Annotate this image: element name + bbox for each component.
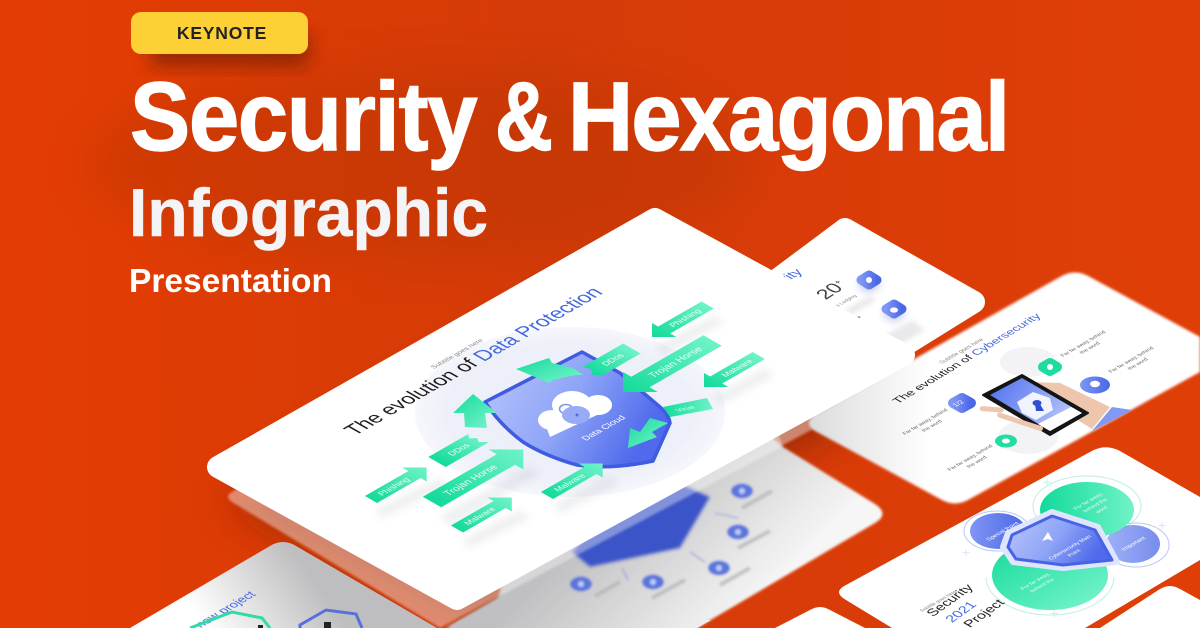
slide title: The evolution of Data Protection (339, 284, 608, 438)
icon: blue chart tile (952, 398, 971, 408)
slide title: 2021 (942, 599, 980, 624)
dark glow behind headings (90, 70, 750, 260)
white screen strip (1038, 407, 1082, 431)
node circles (570, 484, 753, 592)
panel: new project slide (130, 542, 437, 628)
fingers (980, 406, 1044, 432)
hexagon: blue (300, 610, 362, 628)
arrow: ddos lower (428, 432, 489, 467)
screen shield (1017, 392, 1053, 420)
icon: blue chart tile: 1/2 (952, 400, 966, 408)
arrow: phishing top: Phishing (667, 307, 704, 329)
shield label: Point (1067, 549, 1083, 558)
arrow: phishing top (640, 298, 720, 344)
node centres (578, 488, 745, 587)
slide title (923, 582, 1008, 628)
arrow: trojan horse lower (415, 440, 541, 512)
captions: Far far away, behind (1060, 330, 1108, 358)
back of hand (1032, 382, 1110, 429)
slide title: Security (923, 582, 977, 618)
captions (902, 330, 1163, 476)
arrow: ddos top: DDos (599, 352, 626, 367)
arrow: trojan horse top: Trojan Horse (646, 345, 706, 380)
lock (560, 404, 590, 424)
arrow: trojan horse top (606, 330, 730, 402)
cloud with lock (538, 391, 612, 437)
title: security & hexagonal: Hexagonal (568, 62, 1008, 171)
badge: keynote (131, 12, 310, 66)
stat: fragment: + (854, 314, 864, 321)
circle: special point: Special Point (986, 521, 1021, 542)
arrow shadows (375, 315, 774, 548)
stat label: vs Lodging (833, 294, 859, 309)
slide subtitle: Subtitle goes here (939, 338, 986, 365)
arrow: malware lower: Malware (461, 505, 498, 527)
icon: blue smile badge (1080, 376, 1110, 394)
arrow: ddos lower: DDos (445, 442, 472, 457)
plus marks: + (1043, 474, 1051, 490)
icon: green thumb badge (995, 434, 1017, 448)
arrow: up broken (453, 394, 497, 428)
blue pentagon (572, 470, 710, 567)
slide title fragment: rity (776, 266, 806, 283)
captions: Far far away, behind (947, 444, 995, 472)
halo (415, 327, 725, 497)
circle: top green (1040, 482, 1134, 538)
slide subtitle: Subtitle goes here (919, 590, 959, 613)
arrow: malware right (535, 456, 615, 502)
subtitle: presentation: Presentation (129, 263, 332, 300)
stat: 20+: :20 (807, 281, 848, 305)
shield (485, 352, 670, 467)
arrow: malware lower (445, 490, 524, 536)
icon: blue gear tile (856, 275, 882, 294)
panel: security stats slide (750, 229, 974, 379)
glass band over lower slide (500, 415, 783, 596)
circle: bottom green: For far away, (1020, 572, 1053, 591)
title: security & hexagonal: & (495, 62, 553, 171)
circle: important: Important (1121, 536, 1148, 552)
panel: cybersecurity slide (809, 272, 1200, 504)
captions: Far far away, behind (1108, 346, 1156, 374)
stat: 20+: + (831, 278, 844, 286)
arrow: malware right: Malware (551, 472, 588, 493)
gears (998, 347, 1058, 454)
circle rings (964, 476, 1169, 615)
connector lines (622, 513, 738, 580)
phone illustration (980, 375, 1132, 435)
label: data cloud: Data Cloud (579, 414, 628, 442)
arrow: virus (663, 398, 713, 417)
hexagon icons (258, 622, 331, 628)
icon: blue thumb tile (881, 304, 907, 323)
captions: the word (1127, 357, 1150, 371)
shield arrow icon (1042, 532, 1053, 541)
panel: security 2021 project slide (839, 447, 1200, 628)
arrow: broken head lower right (628, 418, 668, 448)
icon: green gear tile (1043, 363, 1057, 371)
title: security & hexagonal (130, 62, 1008, 171)
arrow: trojan horse lower: Trojan Horse (441, 463, 501, 498)
circle: bottom green: behind the (1029, 578, 1057, 593)
panel: small slide bottom right (1100, 586, 1200, 628)
phone body (983, 375, 1088, 435)
slide subtitle: Subtitle goes here (430, 338, 486, 370)
panel: glass layer behind main slide (228, 270, 830, 628)
panel: main data protection slide (218, 219, 904, 599)
arrow: malware top: Malware (719, 357, 756, 379)
circle: special point (970, 513, 1026, 549)
arm and sleeve (1092, 407, 1132, 431)
arrow: ddos top (581, 344, 641, 378)
circle: bottom green (992, 540, 1108, 610)
circle: important (1106, 525, 1160, 563)
subtitle: infographic: Infographic (129, 175, 488, 251)
badge: keynote: KEYNOTE (177, 23, 267, 43)
hexagon: green (190, 612, 270, 628)
arrow: phishing lower (359, 460, 439, 506)
captions: Far far away, behind (902, 408, 950, 436)
panel: small slide bottom centre (775, 607, 865, 628)
circle: top green: behind the (1082, 498, 1110, 513)
node label smudges (595, 491, 772, 598)
slide title: The evolution of Cybersecurity (890, 312, 1045, 405)
keyhole (1032, 400, 1044, 411)
captions: the word (921, 419, 944, 433)
captions: the word (966, 455, 989, 469)
arrow: phishing lower: Phishing (375, 476, 412, 497)
panel: blurred lower slide (445, 415, 882, 628)
plus marks (962, 474, 1166, 621)
arrow: malware top (692, 348, 771, 394)
arrow: broken head left (516, 358, 583, 383)
phone screen (990, 378, 1082, 431)
plus marks: + (962, 544, 970, 560)
shield: cybersecurity main point (1003, 512, 1117, 568)
captions: the word (1079, 341, 1102, 355)
plus marks: + (1158, 517, 1166, 533)
shadow under main slide (225, 270, 870, 620)
title: security & hexagonal: Security (130, 62, 477, 171)
lower slide bottom edge strip (449, 620, 711, 628)
plus marks: + (1050, 605, 1058, 621)
circle: top green: word (1093, 506, 1110, 515)
shield label: Cybersecurity Main (1048, 535, 1094, 561)
stat: fragment: 3 (847, 316, 866, 327)
shadow patches (845, 296, 925, 348)
circle: top green: For far away, (1073, 492, 1106, 511)
arrow: virus: Virus (675, 405, 697, 413)
